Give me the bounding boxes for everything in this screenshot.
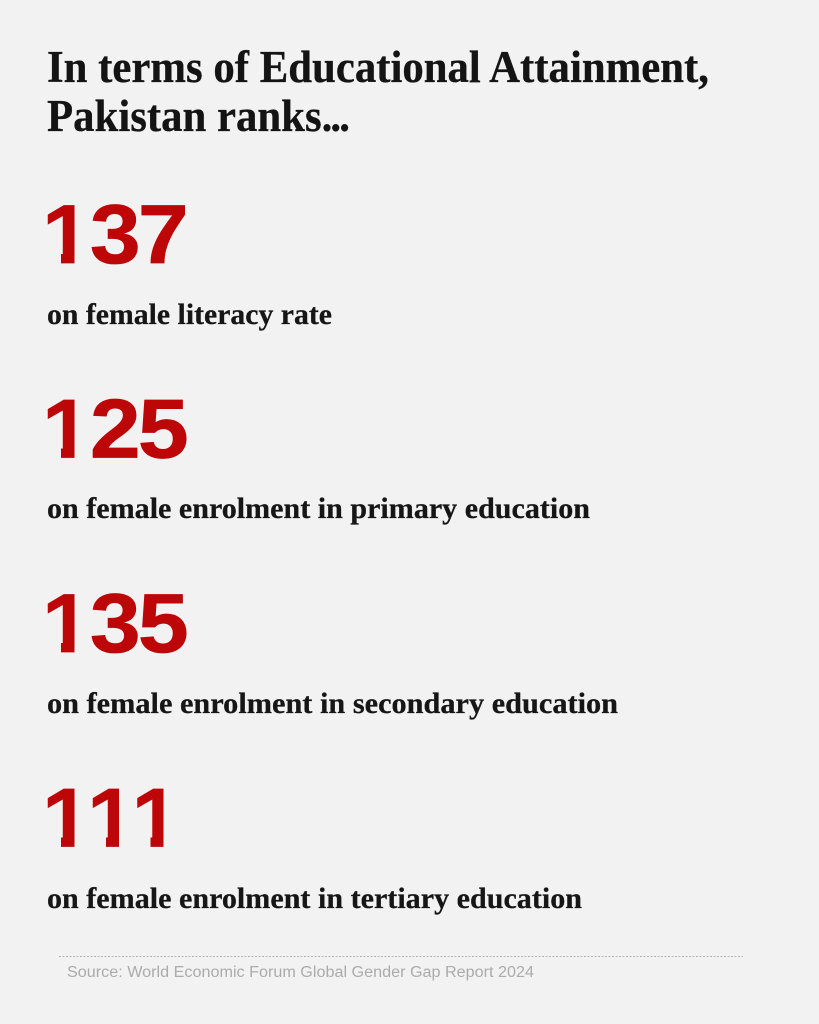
title: In terms of Educational Attainment, <box>47 42 709 92</box>
label: primary: on female enrolment in primary education <box>47 492 590 525</box>
stat: female literacy rate <box>48 204 332 331</box>
source note: Source: World Economic Forum Global Gender Gap Report 2024 <box>67 964 534 981</box>
rank number 111: 111 <box>42 771 182 865</box>
label: literacy: on female literacy rate <box>47 298 332 331</box>
stat: tertiary education <box>48 788 582 915</box>
rank number 125: 125 <box>42 382 189 476</box>
title: Pakistan ranks... <box>47 91 349 141</box>
title <box>47 42 709 141</box>
stat: secondary education <box>48 593 618 720</box>
stat: primary education <box>48 398 590 525</box>
label: secondary: on female enrolment in secondary education <box>47 687 618 720</box>
label: tertiary: on female enrolment in tertiary education <box>47 882 582 915</box>
rank number 135: 135 <box>42 576 189 670</box>
rank number 137: 137 <box>42 187 189 281</box>
